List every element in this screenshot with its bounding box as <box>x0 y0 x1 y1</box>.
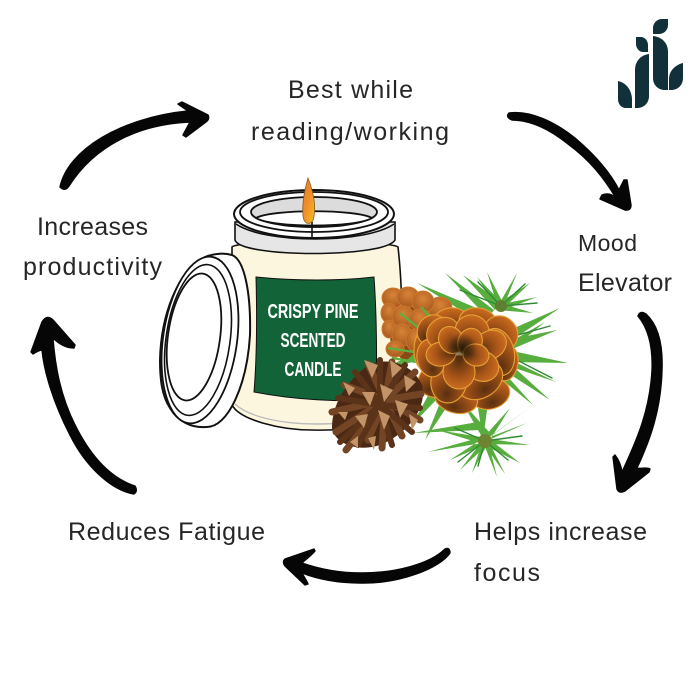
text: best while reading/working: reading/working <box>251 118 449 146</box>
text: best while reading/working: Best while <box>288 76 413 104</box>
arrow: reading to mood <box>508 113 631 210</box>
pine cluster <box>332 272 568 477</box>
text: helps increase focus <box>474 518 647 587</box>
arrow: mood to focus <box>613 312 662 492</box>
brown pine cone <box>332 360 423 450</box>
text: helps increase focus: focus <box>474 559 540 587</box>
needle hubs <box>495 300 507 312</box>
logo <box>618 19 683 108</box>
lid <box>152 252 250 428</box>
cone core <box>447 333 477 363</box>
label text: CANDLE <box>284 359 342 381</box>
pine needles <box>385 272 568 477</box>
wick <box>311 222 313 238</box>
text: increases productivity: productivity <box>23 253 162 281</box>
small orange cone <box>381 287 452 362</box>
jar neck <box>235 222 395 254</box>
text: reduces fatigue: Reduces Fatigue <box>68 518 265 546</box>
text: increases productivity <box>23 213 162 281</box>
jar rim <box>234 190 394 238</box>
text: mood elevator: Mood <box>578 230 637 256</box>
label text <box>268 301 358 381</box>
text: helps increase focus: Helps increase <box>474 518 647 546</box>
text: increases productivity: Increases <box>37 213 148 241</box>
text: mood elevator <box>578 230 672 297</box>
text: mood elevator: Elevator <box>578 269 672 297</box>
arrow: focus to fatigue <box>284 548 450 585</box>
arrow: fatigue to productivity <box>31 317 136 494</box>
label <box>254 277 377 401</box>
label text: CRISPY PINE <box>268 301 358 323</box>
large orange cone <box>411 304 525 418</box>
needles over small cone <box>388 307 437 362</box>
jar body <box>232 242 402 430</box>
text: best while reading/working <box>251 76 449 146</box>
flame <box>303 178 315 224</box>
label text: SCENTED <box>280 330 346 352</box>
arrow: productivity to reading <box>60 102 209 189</box>
candle jar <box>152 178 402 430</box>
